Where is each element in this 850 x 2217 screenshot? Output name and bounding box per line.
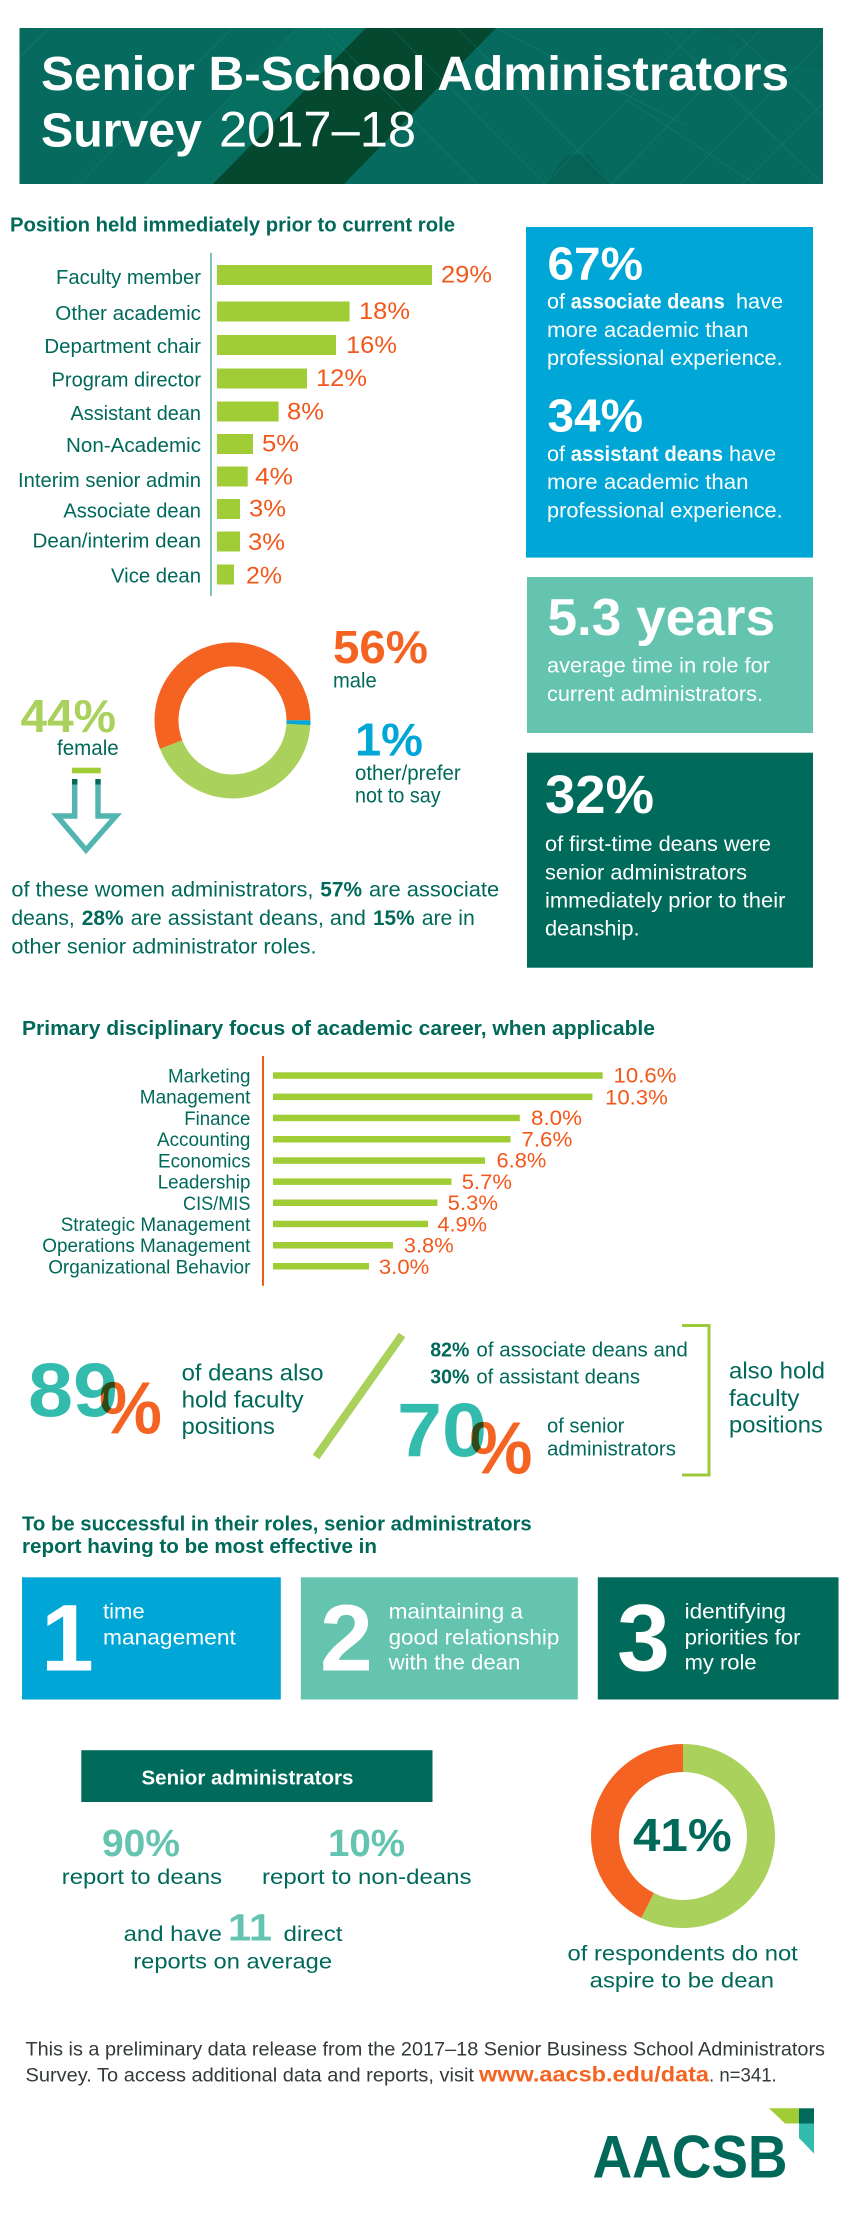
panel: first-time deans: 32% [545,765,654,825]
stat: 70% of senior administrators: of senior [547,1415,625,1437]
stat: 11 direct reports: 11 [228,1908,272,1950]
bar: economics: 6.8% [496,1150,546,1173]
bar: cis/mis: CIS/MIS [183,1194,250,1215]
text block: women administrators: 28% [82,906,124,930]
callout: 56% male: male [333,669,377,692]
heading: position held: Position held immediately prior to current role [10,214,455,236]
panel: 2 relationship with the dean: 2 [320,1585,373,1691]
bar: operations management [42,1235,454,1258]
bar: department chair [44,332,397,359]
bar: finance: 8.0% [531,1107,582,1130]
bar: strategic management: 4.9% [437,1213,487,1236]
panel: 3 identifying priorities: my role [685,1651,757,1674]
bar: other academic: Other academic [55,303,201,325]
panel: first-time deans: immediately prior to their [545,889,785,913]
text block: women administrators: deans, [11,906,75,930]
bar: cis/mis: 5.3% [448,1192,498,1215]
stat: 11 direct reports [124,1908,343,1974]
bar chart: disciplinary focus [42,1056,677,1286]
bar: finance: Finance [184,1109,250,1130]
bar: assistant dean: 8% [287,398,324,426]
bar: faculty member: Faculty member [56,267,201,289]
text block: also hold faculty positions: positions [729,1411,823,1437]
divider: slash [316,1335,402,1457]
panel: academic experience: of [547,290,565,314]
stat: 11 direct reports: direct [284,1923,343,1946]
panel: first-time deans: deanship. [545,917,640,941]
panel: academic experience: have [729,442,776,466]
bar: program director: 12% [316,365,367,392]
stat: 82% and 30%: 30% [430,1366,470,1388]
panel: 3 identifying priorities [598,1577,838,1700]
bar: program director: Program director [52,370,201,392]
panel: 2 relationship with the dean: maintaining a [389,1601,523,1624]
bar: organizational behavior: 3.0% [379,1256,429,1279]
stat: 11 direct reports: and have [124,1923,222,1946]
bar: non-academic: 5% [262,431,299,458]
stat: 70% of senior administrators [397,1389,676,1490]
bar: leadership: Leadership [158,1173,250,1194]
donut chart: gender [167,654,299,786]
stat: 10% report to non-deans [262,1823,472,1889]
bar: associate dean: 3% [249,496,286,523]
panel: academic experience: 34% [548,390,643,442]
panel: average time in role: average time in role for [547,654,770,678]
bar: cis/mis [183,1192,498,1215]
bar: department chair: 16% [346,332,397,359]
bar: associate dean: Associate dean [63,500,201,522]
stat: 82% and 30% [430,1340,688,1388]
stat: 90% report to deans: report to deans [62,1866,222,1889]
callout: 44% female: female [57,737,119,760]
stat: 70% of senior administrators: 70 [397,1389,487,1474]
callout: 44% female: 44% [21,690,116,742]
panel: 1 time management: time [103,1601,145,1624]
bar: marketing: Marketing [168,1066,250,1087]
bar: dean/interim dean: Dean/interim dean [32,531,201,553]
panel: 2 relationship with the dean: with the dean [388,1651,520,1674]
panel: 2 relationship with the dean [301,1577,578,1700]
stat: 89% of deans: 89 [28,1349,118,1434]
stat: 70% of senior administrators: administrators [547,1439,676,1461]
stat: 89% of deans [28,1349,324,1450]
bar: management: 10.3% [605,1086,668,1109]
footer note [26,2039,825,2086]
bar: organizational behavior [48,1256,429,1279]
bar: non-academic: Non-Academic [66,435,201,457]
text block: women administrators: other senior administrator roles. [11,934,317,958]
bar: other academic [55,298,410,325]
panel: academic experience: professional experience. [547,346,783,370]
panel: 3 identifying priorities: 3 [617,1585,670,1691]
bar chart: position held prior to current role [18,253,492,596]
stat: 82% and 30%: of associate deans and [476,1340,688,1362]
panel: academic experience: assistant deans [571,442,723,466]
bar: accounting: Accounting [157,1130,250,1151]
text block: also hold faculty positions: faculty [729,1385,800,1411]
stat: 70% of senior administrators: % [470,1406,532,1490]
callout: 56% male: 56% [333,621,428,673]
bar: management [140,1086,668,1109]
panel: average time in role: current administrators. [547,682,763,706]
bar: management: Management [140,1088,251,1109]
panel: 1 time management [22,1577,281,1700]
panel: academic experience: of [547,442,565,466]
bar: leadership [158,1171,512,1194]
panel: academic experience: have [736,290,783,314]
text block: women administrators: of these women administrators, [11,878,313,902]
text block: women administrators: 15% [373,906,415,930]
header bar: senior administrators [81,1750,433,1802]
panel: academic experience: 67% [548,237,643,289]
stat: 89% of deans: % [99,1366,162,1450]
text block: respondents: of respondents do not [568,1943,798,1966]
callout: 1% other: not to say [355,785,441,808]
panel: academic experience [526,227,813,558]
callout: 1% other: 1% [355,714,423,766]
bar: program director [52,365,367,392]
header bar: senior administrators: Senior administrators [142,1768,353,1790]
panel: 1 time management: management [103,1626,236,1650]
bar: vice dean: 2% [246,563,282,590]
stat: 82% and 30%: of assistant deans [476,1366,640,1388]
stat: 10% report to non-deans: report to non-deans [262,1866,472,1889]
bar: vice dean: Vice dean [111,566,201,588]
bar: economics [158,1150,546,1173]
bar: dean/interim dean [32,529,285,556]
bar: assistant dean: Assistant dean [70,403,201,425]
donut chart: do not aspire to be dean [605,1758,761,1914]
bar: interim senior admin [18,464,293,492]
bar: interim senior admin: Interim senior admin [18,470,201,492]
title text: 2017–18 [219,102,416,158]
footer note: . n=341. [709,2064,777,2086]
bar: department chair: Department chair [44,336,201,358]
stat: 89% of deans: positions [182,1413,275,1439]
text block: women administrators [11,878,499,958]
bar: dean/interim dean: 3% [248,529,285,556]
panel: academic experience: professional experience. [547,498,783,522]
callout: 1% other: other/prefer [355,762,461,785]
bar: finance [184,1107,582,1130]
text block: respondents [568,1943,798,1992]
stat: 82% and 30%: 82% [430,1340,470,1362]
bar: accounting: 7.6% [521,1129,572,1152]
bar: strategic management: Strategic Management [61,1215,251,1236]
panel: first-time deans [527,753,813,968]
text block: respondents: aspire to be dean [590,1970,774,1992]
footer note: www.aacsb.edu/data [478,2064,709,2086]
bar: organizational behavior: Organizational Behavior [48,1257,251,1278]
panel: average time in role [527,577,813,733]
bar: strategic management [61,1213,487,1236]
footer note: Survey. To access additional data and reports, visit [26,2064,475,2086]
bar: other academic: 18% [359,298,410,325]
bar: vice dean [111,563,282,590]
title text [41,48,789,158]
title text: Senior B-School Administrators [41,48,789,101]
heading: most effective in: To be successful in their roles, senior administrators [22,1513,532,1535]
bar: faculty member [56,262,492,289]
donut chart: do not aspire to be dean: 41% [633,1809,732,1861]
stat: 89% of deans: of deans also [182,1360,324,1386]
title text: Survey [41,105,202,158]
logo: AACSB: AACSB [592,2124,788,2191]
title banner [20,28,823,184]
bar: interim senior admin: 4% [255,464,293,490]
text block: women administrators: 57% [320,878,362,902]
stat: 11 direct reports: reports on average [133,1951,332,1974]
panel: first-time deans: of first-time deans were [545,832,771,856]
stat: 89% of deans: hold faculty [182,1386,304,1412]
bar: non-academic [66,431,299,458]
panel: 1 time management: 1 [41,1585,94,1691]
bar: accounting [157,1129,572,1152]
heading: most effective in [22,1513,532,1558]
bar: leadership: 5.7% [462,1171,512,1194]
stat: 90% report to deans: 90% [102,1823,180,1865]
panel: academic experience: more academic than [547,470,748,494]
heading: primary disciplinary focus: Primary disciplinary focus of academic career, when applicable [22,1018,655,1040]
stat: 90% report to deans [62,1823,222,1889]
text block: women administrators: are in [422,906,475,930]
text block: women administrators: are assistant deans, and [131,906,366,930]
callout: 1% other [355,714,461,808]
callout: 44% female [21,690,119,760]
bar: operations management: Operations Management [42,1236,251,1257]
bar: marketing: 10.6% [614,1065,676,1088]
panel: 3 identifying priorities: priorities for [685,1626,800,1650]
text block: also hold faculty positions: also hold [729,1357,825,1383]
panel: average time in role: 5.3 years [548,589,775,647]
panel: first-time deans: senior administrators [545,860,747,884]
panel: academic experience: more academic than [547,318,748,342]
bracket [682,1326,709,1475]
text block: also hold faculty positions [729,1357,825,1437]
bar: economics: Economics [158,1151,250,1172]
bar: assistant dean [70,398,324,426]
panel: academic experience: associate deans [571,290,725,314]
text block: women administrators: are associate [369,878,499,902]
footer note: This is a preliminary data release from the 2017–18 Senior Business School Administrators [26,2039,825,2061]
stat: 10% report to non-deans: 10% [328,1823,405,1865]
heading: most effective in: report having to be most effective in [22,1536,377,1558]
panel: 3 identifying priorities: identifying [685,1601,786,1624]
icon: down arrow [57,768,116,850]
panel: 2 relationship with the dean: good relationship [389,1626,559,1650]
bar: operations management: 3.8% [404,1235,454,1258]
bar: faculty member: 29% [441,262,492,288]
bar: associate dean [63,496,286,523]
bar: marketing [168,1065,676,1088]
